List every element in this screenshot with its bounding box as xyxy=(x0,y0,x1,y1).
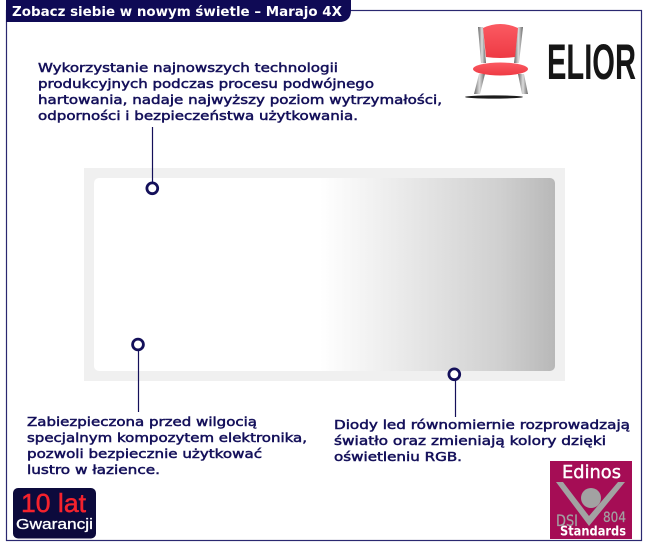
callout text: moisture protection: Zabiezpieczona przed wilgocią xyxy=(27,415,257,430)
callout text: technology: Wykorzystanie najnowszych technologii xyxy=(38,61,338,76)
badge: Edinos DSI 804 Standards: Standards xyxy=(560,524,626,540)
callout text: moisture protection: specjalnym kompozytem elektronika, xyxy=(27,431,307,446)
callout marker: top xyxy=(147,127,158,194)
callout text: technology: odporności i bezpieczeństwa użytkowania. xyxy=(38,109,358,124)
logo: Elior chair xyxy=(465,24,528,99)
callout text: technology: produkcyjnych podczas procesu podwójnego xyxy=(38,77,374,92)
callout text: moisture protection: pozwoli bezpiecznie użytkować xyxy=(27,447,262,462)
callout text: technology xyxy=(38,61,442,124)
callout marker: right xyxy=(449,369,460,417)
callout text: technology: hartowania, nadaje najwyższy poziom wytrzymałości, xyxy=(38,93,442,108)
badge: Edinos DSI 804 Standards: DSI xyxy=(556,511,578,530)
title banner xyxy=(6,0,351,22)
badge: Edinos DSI 804 Standards: Edinos xyxy=(562,463,621,483)
callout marker: left xyxy=(133,339,143,412)
callout text: LED: Diody led równomiernie rozprowadzają xyxy=(334,418,630,433)
badge: 10 years warranty xyxy=(13,488,96,538)
callout text: LED: oświetleniu RGB. xyxy=(334,450,462,465)
badge: Edinos DSI 804 Standards xyxy=(550,461,632,540)
callout text: moisture protection: lustro w łazience. xyxy=(27,463,160,478)
badge: 10 years warranty: Gwarancji xyxy=(16,517,93,533)
callout text: LED: światło oraz zmieniają kolory dzięki xyxy=(334,434,606,449)
callout text: moisture protection xyxy=(27,415,307,478)
badge: 10 years warranty: 10 lat xyxy=(21,488,87,518)
title banner: Zobacz siebie w nowym świetle – Marajo 4X xyxy=(12,5,342,20)
badge: Edinos DSI 804 Standards: 804 xyxy=(603,510,626,526)
callout text: LED xyxy=(334,418,630,465)
mirror product image xyxy=(84,168,565,381)
